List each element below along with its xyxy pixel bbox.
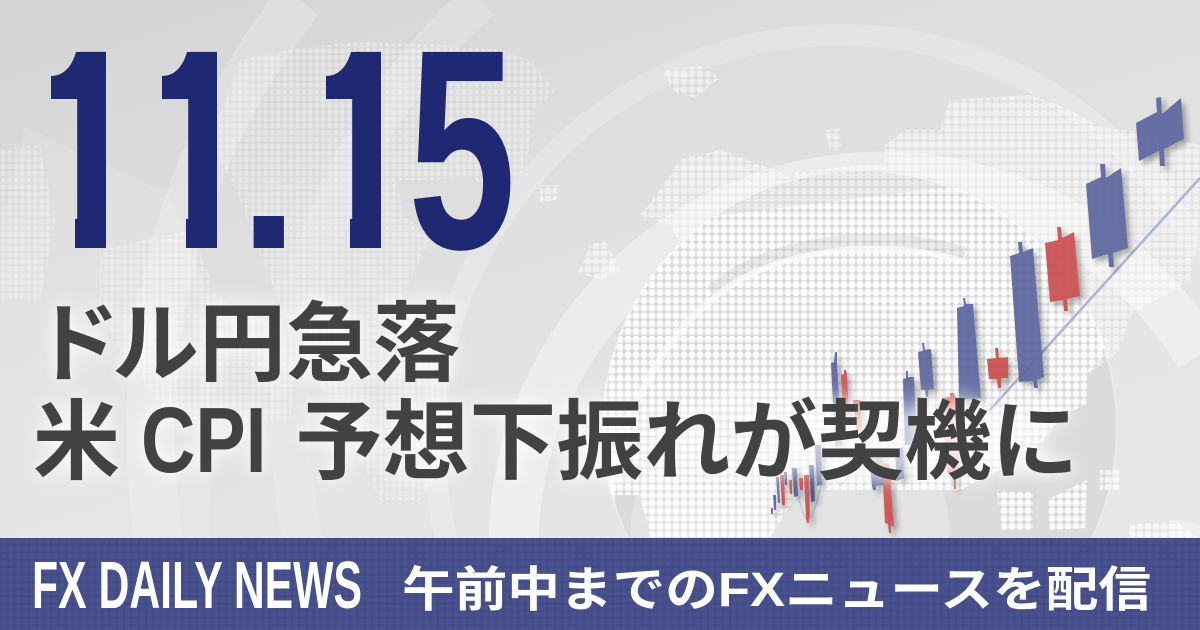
red candles — [780, 227, 1080, 533]
trend line — [797, 178, 1200, 520]
world map dots, bright continents inside globe — [604, 188, 1102, 537]
globe disc — [602, 170, 1118, 630]
footer title: FX DAILY NEWS — [32, 548, 362, 623]
soft veil behind headline — [780, 412, 1050, 474]
lower glow — [630, 378, 950, 538]
left streak highlights — [0, 127, 210, 538]
footer bar — [0, 538, 1200, 630]
headline line 2: CPI — [141, 388, 267, 492]
date heading 11.15 — [51, 52, 510, 251]
world map dots, dim Europe and Russia outside globe — [540, 66, 1200, 400]
candlestick chart — [771, 97, 1200, 533]
date heading 11.15: . — [239, 53, 299, 294]
headline line 2: 米 予想下振れが契機に — [33, 394, 1078, 491]
footer tagline: 午前中までのFXニュースを配信 — [402, 564, 1151, 617]
headline line 1: ドル円急落 — [33, 296, 460, 393]
world map dots, left small map — [0, 42, 555, 500]
blue candles — [771, 97, 1184, 514]
globe highlights — [604, 170, 1118, 538]
small islands at lower right — [1090, 338, 1198, 538]
